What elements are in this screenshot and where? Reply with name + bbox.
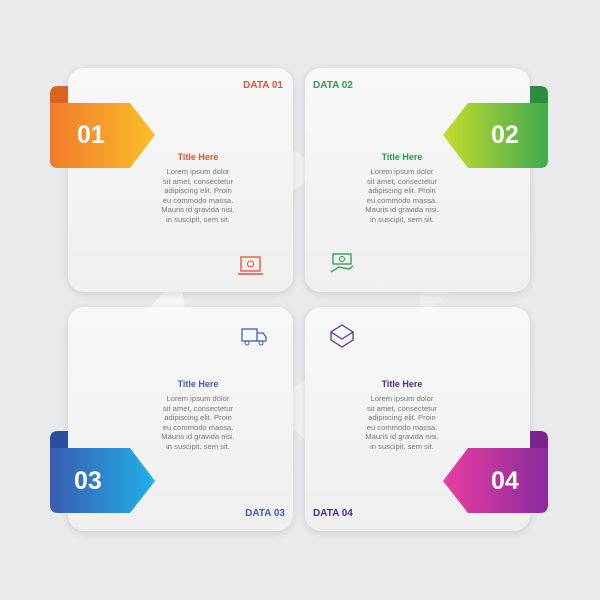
icon: laptop — [238, 256, 263, 275]
title 4: Title Here — [382, 379, 422, 389]
data label 02: DATA 02 — [313, 80, 353, 91]
text 4: Lorem ipsum dolor — [371, 394, 433, 403]
text 1: sit amet, consectetur — [163, 177, 233, 186]
text 4 — [365, 394, 439, 451]
text 3: eu commodo massa. — [163, 423, 233, 432]
tab 04: 04 — [491, 467, 519, 495]
text 2: eu commodo massa. — [367, 196, 437, 205]
title 1: Title Here — [178, 152, 218, 162]
text 2: sit amet, consectetur — [367, 177, 437, 186]
tab 03 — [50, 431, 155, 513]
icon: delivery truck — [241, 328, 267, 346]
text 2: in suscipit, sem sit. — [370, 215, 434, 224]
card 3 — [68, 307, 293, 531]
text 1: Lorem ipsum dolor — [167, 167, 229, 176]
card 1 — [68, 68, 293, 292]
text 2: Lorem ipsum dolor — [371, 167, 433, 176]
text 4: eu commodo massa. — [367, 423, 437, 432]
text 3: adipiscing elit. Proin — [164, 413, 232, 422]
tab 02: 02 — [491, 121, 519, 149]
tab 01 — [50, 86, 155, 168]
card 2 — [305, 68, 530, 292]
icon: box — [330, 324, 354, 348]
data label 01: DATA 01 — [243, 80, 283, 91]
tab 04 — [443, 431, 548, 513]
text 4: in suscipit, sem sit. — [370, 442, 434, 451]
text 1 — [161, 167, 235, 224]
text 3: in suscipit, sem sit. — [166, 442, 230, 451]
text 3: Lorem ipsum dolor — [167, 394, 229, 403]
data label 04: DATA 04 — [313, 508, 353, 519]
text 2: adipiscing elit. Proin — [368, 186, 436, 195]
title 2: Title Here — [382, 152, 422, 162]
tab 02 — [443, 86, 548, 168]
text 4: Mauris id gravida nisi. — [365, 432, 439, 441]
title 3: Title Here — [178, 379, 218, 389]
card 4 — [305, 307, 530, 531]
text 2: Mauris id gravida nisi. — [365, 205, 439, 214]
text 1: Mauris id gravida nisi. — [161, 205, 235, 214]
text 4: sit amet, consectetur — [367, 404, 437, 413]
text 1: eu commodo massa. — [163, 196, 233, 205]
text 1: adipiscing elit. Proin — [164, 186, 232, 195]
tab 01: 01 — [77, 121, 105, 149]
data label 03: DATA 03 — [245, 508, 285, 519]
text 1: in suscipit, sem sit. — [166, 215, 230, 224]
text 2 — [365, 167, 439, 224]
text 4: adipiscing elit. Proin — [368, 413, 436, 422]
icon: money hand — [330, 253, 354, 272]
tab 03: 03 — [74, 467, 102, 495]
text 3: Mauris id gravida nisi. — [161, 432, 235, 441]
text 3 — [161, 394, 235, 451]
text 3: sit amet, consectetur — [163, 404, 233, 413]
